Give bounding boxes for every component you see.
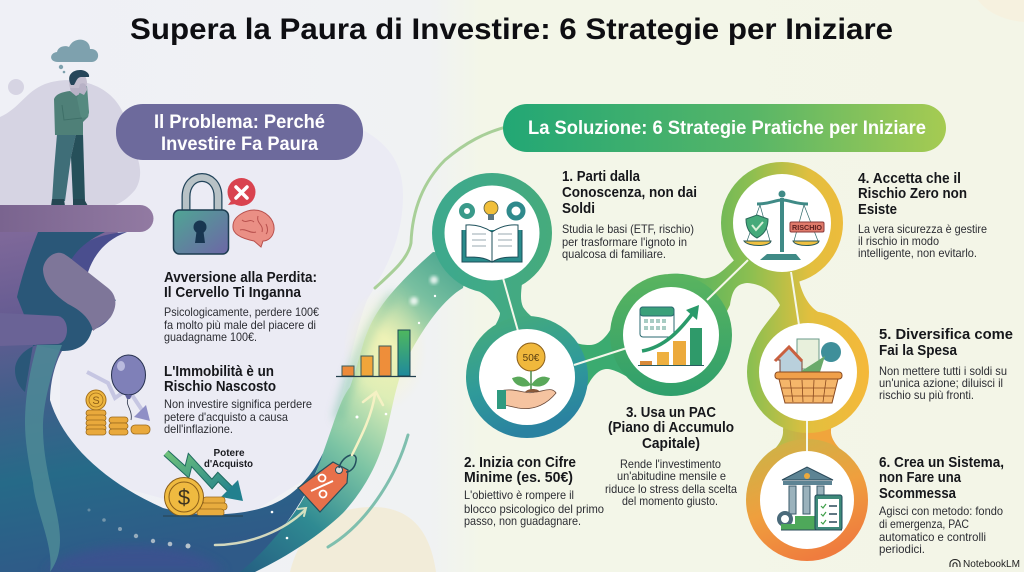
bar chart: [336, 330, 416, 376]
strategy 3 text: Capitale): [642, 435, 700, 452]
text block: loss aversion: [164, 269, 319, 344]
cliff rock lighter fold: [43, 253, 115, 331]
strategy 1 text: per trasformare l'ignoto in: [562, 235, 687, 249]
strategy 2 text: [464, 454, 604, 528]
text block: hidden risk: [164, 363, 312, 436]
problem pill heading: Investire Fa Paura: [161, 134, 318, 155]
chart: falling purchasing power: [163, 448, 253, 516]
strategy 2 text: 2. Inizia con Cifre: [464, 454, 576, 471]
strategy 2 text: L'obiettivo è rompere il: [464, 488, 574, 502]
icon: deflating balloon and coins: [86, 355, 150, 435]
strategy 2 text: passo, non guadagnare.: [464, 514, 581, 528]
node 5 icon: shopping basket: [759, 323, 857, 421]
strategy 6 text: periodici.: [879, 542, 925, 556]
strategy 2 text: Minime (es. 50€): [464, 469, 573, 486]
node 6 icon: bank and checklist: [760, 451, 854, 549]
man figure: [51, 70, 89, 206]
chart: falling purchasing power: $: [178, 485, 190, 510]
node 1 icon: book and ideas: [444, 186, 540, 280]
NotebookLM badge: NotebookLM: [963, 558, 1020, 570]
strategy 1 text: [562, 168, 697, 261]
man backdrop blob: [0, 80, 140, 206]
cliff ledge: [0, 205, 153, 232]
text block: loss aversion: fa molto più male del piacere di: [164, 318, 316, 332]
strategy 6 text: Scommessa: [879, 485, 957, 502]
icon: worry cloud: [51, 40, 98, 73]
text block: loss aversion: Avversione alla Perdita:: [164, 269, 317, 286]
arrow: rising light: [352, 392, 383, 455]
chart: falling purchasing power: d'Acquisto: [204, 459, 253, 470]
text block: hidden risk: L'Immobilità è un: [164, 363, 274, 380]
glints on band: [271, 276, 438, 539]
thin accent arcs: [328, 126, 510, 547]
strategy 1 text: Studia le basi (ETF, rischio): [562, 222, 694, 236]
node 4 icon: balance with risk: RISCHIO: [792, 223, 822, 232]
icon: padlock with brain: [174, 178, 274, 254]
illustration: worried man on cliff: [0, 40, 140, 206]
strategy 1 text: Soldi: [562, 200, 595, 217]
chart: falling purchasing power: Potere: [213, 448, 245, 459]
strategy 5 text: un'unica azione; diluisci il: [879, 376, 1003, 390]
dark wave and cliff base: [0, 225, 323, 572]
strategy 5 text: Fai la Spesa: [879, 342, 958, 359]
small dot: [8, 79, 24, 95]
text block: loss aversion: Psicologicamente, perdere 100€: [164, 305, 319, 319]
icon: price tag: [298, 455, 356, 512]
node 4 icon: balance with risk: [733, 174, 831, 272]
strategy 5 text: [879, 326, 1013, 402]
strategy 3 text: un'abitudine mensile e: [617, 469, 726, 483]
strategy 6 text: Agisci con metodo: fondo: [879, 504, 1003, 518]
strategy 1 text: 1. Parti dalla: [562, 168, 641, 185]
node 3 icon: PAC calendar and growth: [623, 287, 719, 383]
text block: hidden risk: petere d'acquisto a causa: [164, 410, 288, 424]
strategy 4 text: 4. Accetta che il: [858, 170, 961, 187]
strategy 5 text: rischio su più fronti.: [879, 388, 974, 402]
lavender backdrop blob: [60, 130, 403, 520]
title: Supera la Paura di Investire: 6 Strategie per Iniziare: [130, 13, 893, 46]
strategy 4 text: [858, 170, 987, 260]
text block: hidden risk: Non investire significa perdere: [164, 397, 312, 411]
text block: loss aversion: guadagname 100€.: [164, 330, 257, 344]
problem pill heading: [116, 104, 363, 160]
node 2 icon: plant coin in hand: 50€: [523, 353, 540, 364]
strategy 3 text: 3. Usa un PAC: [626, 404, 716, 421]
strategy 6 text: di emergenza, PAC: [879, 517, 969, 531]
strategy 4 text: La vera sicurezza è gestire: [858, 222, 987, 236]
text block: hidden risk: Rischio Nascosto: [164, 378, 276, 395]
progress dots: [88, 508, 190, 548]
text block: loss aversion: Il Cervello Ti Inganna: [164, 284, 302, 301]
strategy 4 text: il rischio in modo: [858, 234, 939, 248]
icon: deflating balloon and coins: S: [92, 395, 100, 407]
swoosh band rising to the solution: [215, 252, 470, 572]
strategy 4 text: Rischio Zero non: [858, 185, 967, 202]
strategy 4 text: intelligente, non evitarlo.: [858, 246, 977, 260]
strategy 2 text: blocco psicologico del primo: [464, 502, 604, 516]
strategy 6 text: 6. Crea un Sistema,: [879, 454, 1004, 471]
strategy 1 text: Conoscenza, non dai: [562, 184, 697, 201]
white connector lines: [503, 260, 807, 452]
strategy 5 text: Non mettere tutti i soldi su: [879, 364, 1007, 378]
text block: hidden risk: dell'inflazione.: [164, 422, 233, 436]
strategy 3 text: riduce lo stress della scelta: [605, 482, 737, 496]
strategy 3 text: [605, 404, 737, 508]
strategy 1 text: qualcosa di familiare.: [562, 247, 666, 261]
strategy 6 text: automatico e controlli: [879, 530, 986, 544]
strategy 6 text: [879, 454, 1004, 556]
strategy 3 text: del momento giusto.: [622, 494, 718, 508]
winding strategy path network: [432, 162, 869, 561]
strategy 5 text: 5. Diversifica come: [879, 326, 1013, 343]
problem pill heading: Il Problema: Perché: [154, 112, 325, 133]
node 2 icon: plant coin in hand: [479, 329, 575, 425]
solution pill heading: [503, 104, 946, 152]
strategy 4 text: Esiste: [858, 201, 897, 218]
strategy 6 text: non Fare una: [879, 469, 962, 486]
arrow: lower glow to tag: [215, 508, 306, 545]
solution pill heading: La Soluzione: 6 Strategie Pratiche per Iniziare: [528, 118, 926, 139]
strategy 3 text: (Piano di Accumulo: [608, 419, 734, 436]
strategy 3 text: Rende l'investimento: [620, 457, 721, 471]
